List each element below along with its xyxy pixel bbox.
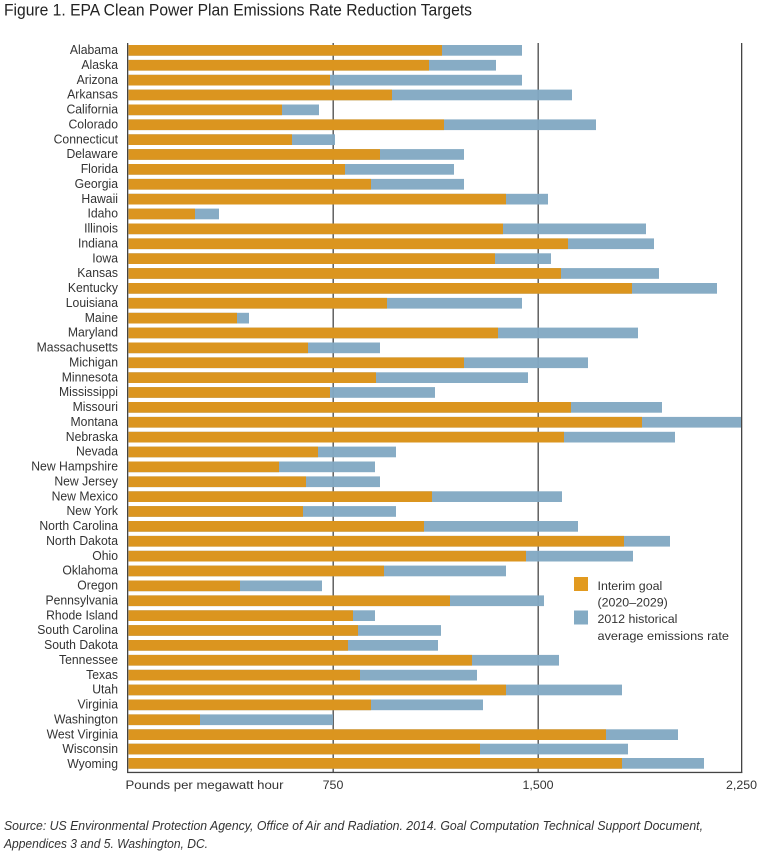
row: Missouri: [73, 400, 662, 414]
row: Oklahoma: Oklahoma: [62, 563, 118, 578]
row: New Hampshire: [31, 459, 375, 474]
row: Oregon: [77, 578, 322, 593]
row: Wisconsin: Wisconsin: [62, 742, 118, 756]
row: Rhode Island: Rhode Island: [46, 608, 118, 622]
row: New York: New York: [67, 504, 119, 518]
row: New York: [67, 504, 396, 518]
row: Illinois: [84, 221, 646, 236]
row: New Mexico: [52, 489, 562, 503]
row: Connecticut: [54, 132, 335, 146]
row: Illinois: Illinois: [84, 221, 118, 236]
row: New Hampshire: New Hampshire: [31, 459, 118, 474]
row: Colorado: [69, 117, 596, 131]
x-axis labels: Pounds per megawatt hour: [126, 778, 284, 792]
row: Wyoming: [67, 757, 704, 771]
row: Ohio: [92, 549, 633, 563]
title: Figure 1. EPA Clean Power Plan Emissions Rate Reduction Targets: [4, 0, 472, 20]
row: Wyoming: Wyoming: [67, 757, 118, 771]
row: Ohio: Ohio: [92, 549, 118, 563]
row: Nebraska: Nebraska: [66, 430, 118, 444]
row: Arkansas: Arkansas: [67, 87, 118, 102]
row: North Dakota: [46, 534, 670, 548]
row: Kansas: Kansas: [77, 266, 118, 280]
row: Maine: Maine: [85, 311, 118, 325]
legend swatch: 2012 historical: [574, 610, 588, 624]
row: Alabama: Alabama: [70, 43, 118, 57]
row: Connecticut: Connecticut: [54, 132, 119, 146]
row: North Carolina: [39, 519, 578, 533]
x-axis labels: [126, 778, 757, 792]
row: Delaware: [66, 147, 464, 161]
axes frame: [127, 43, 742, 773]
row: New Jersey: New Jersey: [54, 474, 119, 488]
row: Louisiana: [66, 296, 522, 310]
row: Iowa: [92, 251, 551, 265]
row: Texas: Texas: [86, 668, 118, 682]
row: North Dakota: North Dakota: [46, 534, 118, 548]
row: Massachusetts: Massachusetts: [37, 340, 118, 355]
row: Mississippi: [59, 385, 435, 399]
chart: emissions rate bars: [31, 43, 741, 772]
x-axis labels: 2,250: [726, 778, 757, 792]
row: Tennessee: Tennessee: [59, 653, 118, 667]
row: Minnesota: [62, 370, 528, 384]
row: Pennsylvania: [45, 593, 544, 607]
row: Florida: Florida: [81, 162, 118, 176]
row: Indiana: [78, 236, 654, 250]
source note: Source: US Environmental Protection Agency, Office of Air and Radiation. 2014. Goal Computation Technical Support Document,: [4, 819, 703, 833]
row: Kentucky: Kentucky: [68, 281, 119, 295]
row: Massachusetts: [37, 340, 380, 355]
row: South Carolina: [37, 623, 441, 637]
row: Alaska: [81, 58, 496, 72]
row: Maine: [85, 311, 249, 325]
x-axis labels: 1,500: [522, 778, 554, 792]
row: Virginia: [78, 697, 483, 712]
row: Nebraska: [66, 430, 675, 444]
row: Kansas: [77, 266, 659, 280]
row: West Virginia: [47, 727, 678, 741]
row: Minnesota: Minnesota: [62, 370, 118, 384]
row: Washington: [54, 712, 333, 726]
row: Utah: [92, 682, 622, 697]
row: Idaho: Idaho: [87, 206, 118, 221]
row: Maryland: Maryland: [68, 325, 118, 340]
row: Georgia: [75, 177, 464, 191]
row: Colorado: Colorado: [69, 117, 118, 131]
row: Oregon: Oregon: [77, 578, 118, 593]
legend swatch: interim goal: [574, 577, 588, 591]
row: Arkansas: [67, 87, 572, 102]
row: Louisiana: Louisiana: [66, 296, 118, 310]
row: Kentucky: [68, 281, 717, 295]
row: New Jersey: [54, 474, 380, 488]
row: Georgia: Georgia: [75, 177, 118, 191]
row: Nevada: Nevada: [76, 444, 118, 459]
row: South Dakota: [44, 638, 438, 652]
row: Arizona: [77, 73, 522, 87]
row: Indiana: Indiana: [78, 236, 118, 250]
row: Montana: Montana: [71, 415, 118, 429]
row: Tennessee: [59, 653, 559, 667]
row: South Carolina: South Carolina: [37, 623, 118, 637]
row: California: California: [66, 102, 118, 117]
row: Wisconsin: [62, 742, 628, 756]
row: Virginia: Virginia: [78, 697, 118, 712]
legend text: interim goal: (2020–2029): [598, 596, 668, 610]
row: Nevada: [76, 444, 396, 459]
row: Hawaii: [81, 192, 548, 206]
row: Utah: Utah: [92, 682, 118, 697]
x-axis labels: 750: [323, 778, 343, 792]
row: Iowa: Iowa: [92, 251, 118, 265]
row: Alabama: [70, 43, 522, 57]
legend text: 2012 historical: 2012 historical: [598, 612, 677, 626]
row: Texas: [86, 668, 477, 682]
row: Hawaii: Hawaii: [81, 192, 118, 206]
row: Rhode Island: [46, 608, 375, 622]
row: Michigan: [69, 355, 588, 369]
row: North Carolina: North Carolina: [39, 519, 118, 533]
row: Montana: [71, 415, 741, 429]
row: Pennsylvania: Pennsylvania: [45, 593, 118, 607]
row: Florida: [81, 162, 454, 176]
row: Alaska: Alaska: [81, 58, 118, 72]
row: Oklahoma: [62, 563, 506, 578]
row: West Virginia: West Virginia: [47, 727, 118, 741]
row: Missouri: Missouri: [73, 400, 118, 414]
row: Washington: Washington: [54, 712, 118, 726]
row: Michigan: Michigan: [69, 355, 118, 369]
row: Delaware: Delaware: [66, 147, 118, 161]
legend text: interim goal: Interim goal: [598, 579, 662, 593]
row: New Mexico: New Mexico: [52, 489, 118, 503]
legend: [574, 577, 729, 643]
row: South Dakota: South Dakota: [44, 638, 118, 652]
legend text: 2012 historical: average emissions rate: [598, 629, 729, 643]
row: Idaho: [87, 206, 219, 221]
row: Mississippi: Mississippi: [59, 385, 118, 399]
row: Maryland: [68, 325, 638, 340]
row: Arizona: Arizona: [77, 73, 118, 87]
row: California: [66, 102, 319, 117]
source note: Appendices 3 and 5. Washington, DC.: [3, 837, 208, 851]
